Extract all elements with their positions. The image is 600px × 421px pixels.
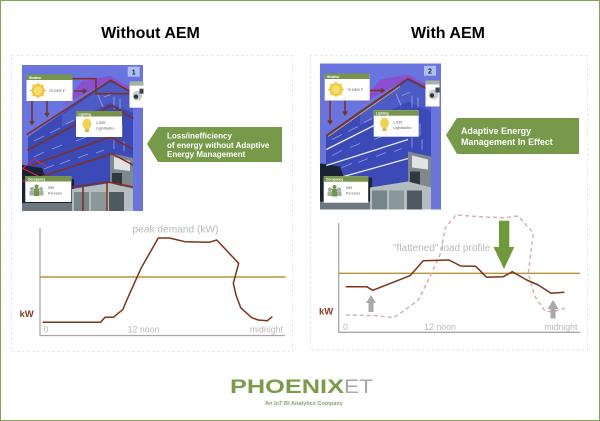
occupancy card: 555: [346, 186, 352, 190]
lighting card: Lighting: [78, 112, 91, 116]
lighting card: 1,535: [96, 121, 105, 125]
occupancy card: [324, 176, 368, 203]
number badge 2: [424, 66, 436, 76]
line chart: with AEM: [319, 215, 580, 332]
line chart: with AEM: 12 noon: [424, 322, 456, 332]
title: With AEM: With AEM: [411, 25, 485, 42]
weather card: Weather: [29, 76, 42, 80]
number badge 2: 2: [428, 68, 432, 76]
camera card: [426, 80, 440, 106]
weather card: 70 DEG F: [347, 88, 364, 92]
building image 2: [320, 64, 441, 210]
weather card: 70 DEG F: [49, 89, 66, 93]
arrow: grey up left: [366, 295, 376, 312]
callout: adaptive: [446, 118, 579, 154]
occupancy card: Persons: [346, 192, 360, 196]
number badge 1: 1: [132, 70, 136, 76]
arrow: grey up right: [548, 300, 558, 318]
line chart: with AEM: kW: [319, 306, 333, 318]
lighting card: [374, 110, 419, 137]
line chart: without AEM: peak demand (kW): [132, 224, 219, 236]
lighting card: [76, 111, 122, 137]
flattened profile: [346, 260, 564, 293]
panel: without AEM: [12, 56, 292, 352]
line chart: without AEM: kW: [20, 309, 34, 320]
logo: Phoenix ET: ET: [344, 377, 373, 398]
line chart: without AEM: [20, 224, 286, 336]
floor lines: [326, 126, 408, 178]
weather card: Weather: [327, 75, 340, 79]
leak marks: [22, 159, 72, 181]
callout: adaptive: Management In Effect: [461, 137, 553, 147]
callout: loss: of energy without Adaptive: [167, 141, 270, 150]
logo: Phoenix ET: PHOENIX: [230, 377, 344, 398]
line chart: with AEM: "flattened" load profile: [393, 243, 491, 254]
lighting card: Lightbulbs: [96, 126, 114, 130]
number badge 1: [128, 67, 140, 77]
callout: adaptive: Adaptive Energy: [461, 126, 531, 136]
callout: loss: Loss/inefficiency: [167, 132, 232, 140]
panel: with AEM: [310, 56, 588, 350]
lighting card: Lightbulbs: [393, 126, 411, 130]
loss arrows: [30, 89, 86, 124]
heat arrows: [328, 88, 384, 124]
line chart: with AEM: midnight: [544, 322, 578, 332]
lighting card: Lighting: [376, 112, 389, 116]
weather card: [26, 74, 72, 101]
line chart: with AEM: 0: [343, 322, 348, 332]
original load profile: [346, 215, 567, 318]
line chart: without AEM: 12 noon: [128, 324, 159, 334]
camera card: [130, 82, 144, 108]
logo: Phoenix ET: [230, 377, 373, 398]
occupancy card: Persons: [48, 192, 62, 196]
roof line: [326, 78, 431, 136]
tagline: An IoT BI Analytics Company: [265, 401, 344, 407]
arrow: green down: [494, 221, 514, 269]
line chart: without AEM: 0: [44, 324, 48, 334]
occupancy card: Occupancy: [326, 178, 343, 182]
callout: loss: [147, 127, 282, 162]
occupancy card: Occupancy: [28, 177, 45, 181]
callout: loss: Energy Management: [167, 150, 246, 159]
title: Without AEM: Without AEM: [101, 25, 200, 42]
building image 1: [22, 65, 144, 211]
energy loss lines: [27, 79, 133, 211]
occupancy card: [25, 176, 71, 202]
line chart: without AEM: midnight: [250, 324, 284, 334]
lighting card: 1,535: [393, 120, 402, 124]
occupancy card: 555: [48, 186, 54, 190]
weather card: [325, 74, 370, 100]
